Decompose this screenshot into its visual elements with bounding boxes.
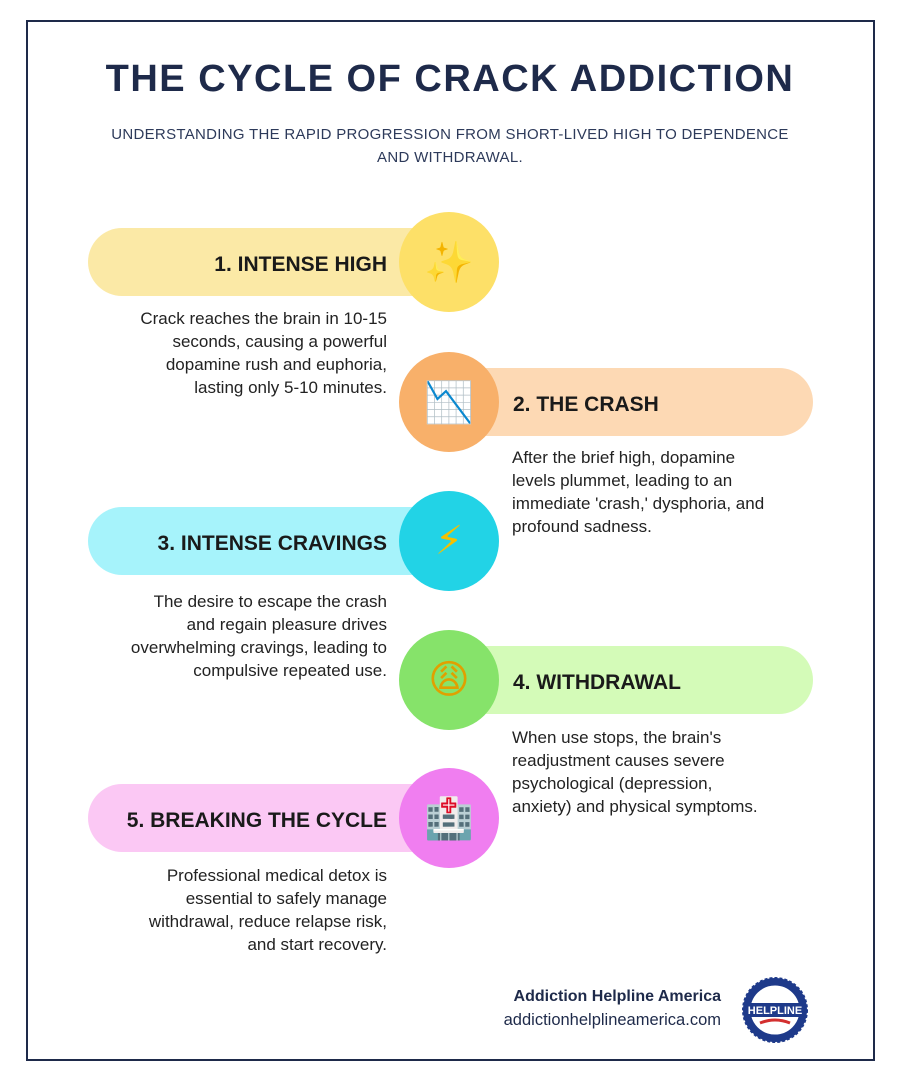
icon: chart down (399, 352, 499, 452)
logo: HELPLINE (748, 1005, 802, 1017)
step 3 (88, 491, 499, 680)
text 5: Professional medical detox is essential to safely manage withdrawal, reduce relapse risk, and start recovery. (149, 866, 387, 954)
step 5 (88, 768, 499, 954)
footer brand (504, 988, 722, 1029)
icon: lightning (399, 491, 499, 591)
icon: sparkles (399, 212, 499, 312)
heading 1: 1. INTENSE HIGH (214, 253, 387, 276)
heading 4: 4. WITHDRAWAL (513, 671, 681, 694)
heading 3: 3. INTENSE CRAVINGS (158, 532, 387, 555)
step 4 (399, 630, 813, 816)
subtitle: UNDERSTANDING THE RAPID PROGRESSION FROM SHORT-LIVED HIGH TO DEPENDENCE AND WITHDRAWAL. (111, 126, 789, 166)
step 1 (88, 212, 499, 397)
text 1: Crack reaches the brain in 10-15 seconds, causing a powerful dopamine rush and euphoria, lasting only 5-10 minutes. (140, 309, 387, 397)
footer brand: addictionhelplineamerica.com (504, 1011, 721, 1029)
text 2: After the brief high, dopamine levels plummet, leading to an immediate 'crash,' dysphoria, and profound sadness. (512, 448, 764, 536)
icon: sparkles: ✨ (424, 240, 474, 286)
heading 5: 5. BREAKING THE CYCLE (127, 809, 387, 832)
icon: hospital (399, 768, 499, 868)
icon: tired face: 😩 (428, 657, 470, 703)
heading 2: 2. THE CRASH (513, 393, 659, 416)
text 3: The desire to escape the crash and regain pleasure drives overwhelming cravings, leading to compulsive repeated use. (131, 592, 387, 680)
footer brand: Addiction Helpline America (514, 988, 721, 1005)
icon: lightning: ⚡ (435, 518, 463, 564)
icon: tired face (399, 630, 499, 730)
text 4: When use stops, the brain's readjustment causes severe psychological (depression, anxiety) and physical symptoms. (512, 728, 758, 816)
icon: chart down: 📉 (424, 380, 474, 426)
icon: hospital: 🏥 (424, 796, 474, 842)
logo (742, 977, 808, 1043)
step 2 (399, 352, 813, 536)
title: THE CYCLE OF CRACK ADDICTION (106, 58, 794, 100)
